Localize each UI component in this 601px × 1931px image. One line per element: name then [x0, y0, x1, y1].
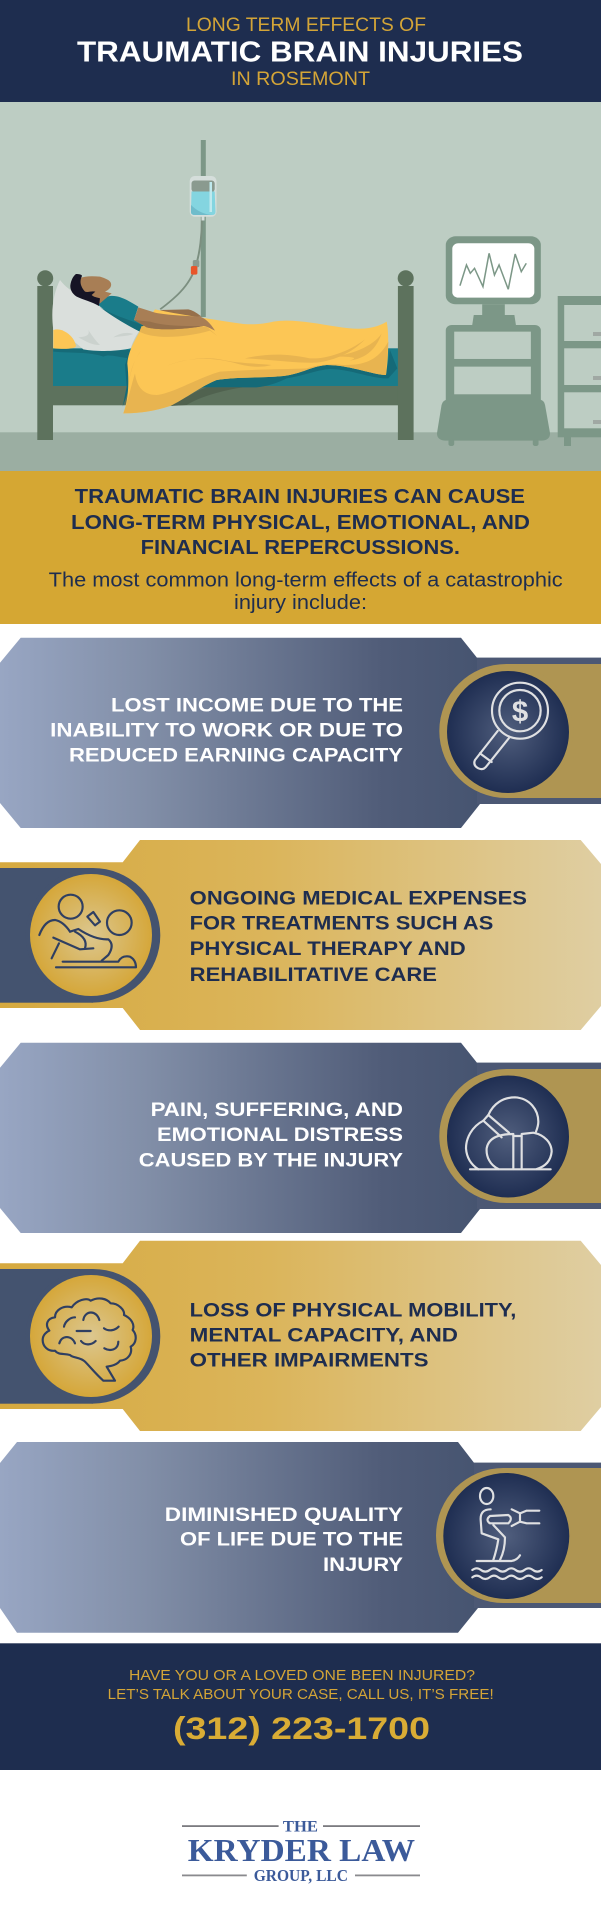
- text: pain and suffering: [139, 1099, 403, 1172]
- call to action text: HAVE YOU OR A LOVED ONE BEEN INJURED?: [129, 1667, 475, 1684]
- call to action footer: [0, 1643, 601, 1770]
- text: medical expenses: ONGOING MEDICAL EXPENSES: [190, 888, 527, 910]
- intro heading: [71, 485, 530, 559]
- text: loss of mobility: [190, 1300, 516, 1372]
- text: pain and suffering: PAIN, SUFFERING, AND: [151, 1099, 403, 1121]
- intro body text: injury include:: [234, 592, 367, 614]
- text: medical expenses: FOR TREATMENTS SUCH AS: [190, 913, 493, 935]
- text: loss of mobility: LOSS OF PHYSICAL MOBILITY,: [190, 1300, 516, 1322]
- text: quality of life: INJURY: [323, 1554, 403, 1576]
- iv tube and clamp: [160, 218, 202, 309]
- logo: the kryder law group: [182, 1819, 420, 1885]
- header banner: [0, 0, 601, 102]
- text: medical expenses: REHABILITATIVE CARE: [190, 964, 437, 986]
- logo: the kryder law group: GROUP, LLC: [254, 1866, 348, 1885]
- text: lost income: REDUCED EARNING CAPACITY: [69, 745, 403, 767]
- text: quality of life: [165, 1504, 403, 1576]
- text: loss of mobility: OTHER IMPAIRMENTS: [190, 1350, 428, 1372]
- text: loss of mobility: MENTAL CAPACITY, AND: [190, 1325, 458, 1347]
- iv pole: [201, 140, 206, 317]
- intro heading: FINANCIAL REPERCUSSIONS.: [141, 536, 460, 559]
- call to action text: LET’S TALK ABOUT YOUR CASE, CALL US, IT’S FREE!: [108, 1686, 494, 1703]
- intro panel: [0, 471, 601, 624]
- icon: water skier: [472, 1488, 542, 1579]
- call to action text: [108, 1667, 494, 1703]
- panel: loss of mobility: [0, 1241, 601, 1431]
- text: lost income: INABILITY TO WORK OR DUE TO: [50, 720, 403, 742]
- title: traumatic brain injuries: TRAUMATIC BRAIN INJURIES: [77, 37, 523, 69]
- text: lost income: [50, 695, 403, 767]
- heading: long term effects of: LONG TERM EFFECTS OF: [186, 14, 426, 36]
- icon: pills: [466, 1097, 552, 1169]
- text: medical expenses: [190, 888, 527, 986]
- panel: pain and suffering: [0, 1043, 601, 1233]
- text: pain and suffering: CAUSED BY THE INJURY: [139, 1150, 403, 1172]
- heading: in rosemont: IN ROSEMONT: [231, 68, 370, 90]
- logo: the kryder law group: THE: [283, 1819, 318, 1836]
- intro heading: LONG-TERM PHYSICAL, EMOTIONAL, AND: [71, 511, 530, 534]
- intro heading: TRAUMATIC BRAIN INJURIES CAN CAUSE: [75, 485, 525, 508]
- side cabinet: [558, 296, 601, 446]
- hospital bed: [37, 270, 414, 440]
- panel: lost income: [0, 638, 601, 828]
- patient and pillows: [52, 274, 145, 358]
- hospital room illustration: [0, 102, 601, 471]
- icon: physical therapy: [39, 895, 136, 967]
- panel: quality of life: [0, 1442, 601, 1633]
- icon: magnifying glass with dollar: $: [512, 695, 528, 728]
- yellow blanket and arm: [123, 307, 397, 413]
- text: pain and suffering: EMOTIONAL DISTRESS: [157, 1124, 403, 1146]
- text: lost income: LOST INCOME DUE TO THE: [111, 695, 403, 717]
- icon: brain: [43, 1298, 136, 1381]
- icon: magnifying glass with dollar: [474, 683, 548, 769]
- phone number: (312) 223-1700: [173, 1710, 430, 1746]
- iv bag: [190, 176, 216, 220]
- text: medical expenses: PHYSICAL THERAPY AND: [190, 938, 466, 960]
- panel: medical expenses: [0, 840, 601, 1030]
- text: quality of life: OF LIFE DUE TO THE: [180, 1529, 403, 1551]
- intro body text: The most common long-term effects of a catastrophic: [49, 570, 563, 592]
- intro body text: [49, 570, 563, 614]
- heart monitor on cart: [437, 236, 550, 446]
- logo: the kryder law group: KRYDER LAW: [188, 1832, 415, 1868]
- text: quality of life: DIMINISHED QUALITY: [165, 1504, 403, 1526]
